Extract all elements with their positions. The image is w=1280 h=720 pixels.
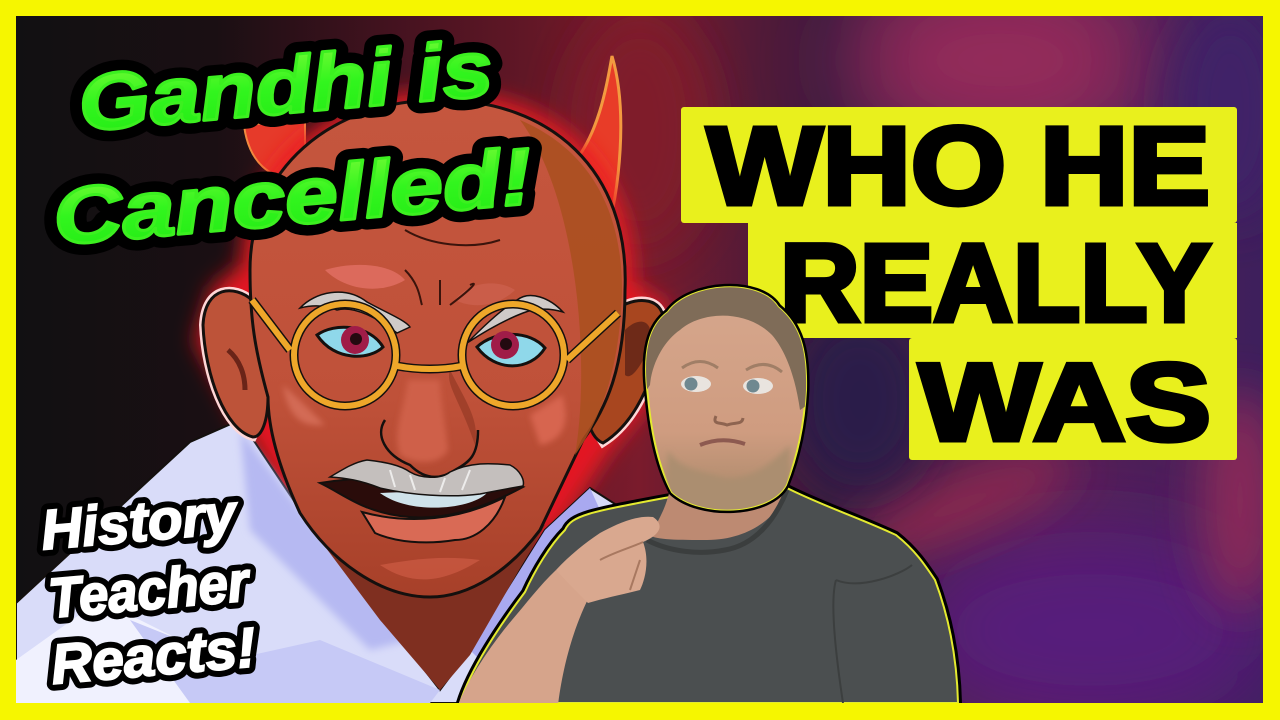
headline text: WHO HE	[707, 105, 1210, 228]
label: History Teacher Reacts	[38, 481, 258, 696]
headline: who he really was: WAS	[919, 341, 1211, 464]
hand	[556, 517, 660, 603]
Reacts: Reacts!	[48, 615, 258, 696]
nose	[715, 416, 743, 425]
History: History	[38, 481, 241, 561]
headline: who he really was: REALLY	[780, 222, 1211, 345]
brows	[682, 362, 718, 368]
right eye	[477, 334, 545, 366]
headline: who he really was	[681, 105, 1237, 464]
neck	[320, 525, 545, 690]
mustache	[330, 460, 523, 496]
Gandhi is: Gandhi is	[75, 23, 496, 148]
face shading	[520, 120, 622, 455]
icon: left horn	[244, 120, 305, 177]
Teacher: Teacher	[46, 549, 254, 630]
red glow around head	[205, 100, 660, 600]
Cancelled: Cancelled!	[50, 131, 536, 262]
lower lip	[362, 497, 505, 542]
Teacher: Teacher	[46, 549, 254, 630]
eyes	[681, 376, 711, 392]
History: History	[38, 481, 241, 561]
beard	[664, 447, 794, 510]
mouth	[700, 440, 745, 445]
collar	[647, 490, 787, 552]
highlight boxes	[681, 107, 1237, 223]
head outline	[646, 287, 806, 510]
right brow	[467, 296, 563, 343]
nose	[381, 420, 478, 477]
right ear	[588, 300, 663, 443]
shirt	[16, 420, 640, 703]
sleeve seam	[833, 565, 912, 703]
Gandhi is: Gandhi is	[75, 23, 496, 148]
left ear	[203, 291, 268, 437]
open mouth	[320, 477, 523, 518]
illustration: devil Gandhi	[16, 56, 663, 703]
man in grey shirt	[458, 280, 958, 705]
left brow	[300, 292, 410, 333]
head	[250, 100, 625, 597]
Reacts: Reacts!	[48, 615, 258, 696]
ear rim light	[203, 291, 663, 443]
left eye	[317, 327, 383, 356]
Cancelled: Cancelled!	[50, 131, 536, 262]
arm	[458, 570, 590, 705]
neck	[652, 494, 782, 540]
glasses	[252, 300, 618, 406]
icon: right horn	[580, 56, 622, 208]
label: Gandhi is Cancelled	[50, 23, 536, 262]
teeth	[380, 491, 487, 508]
hair	[646, 287, 806, 410]
torso	[460, 487, 958, 703]
